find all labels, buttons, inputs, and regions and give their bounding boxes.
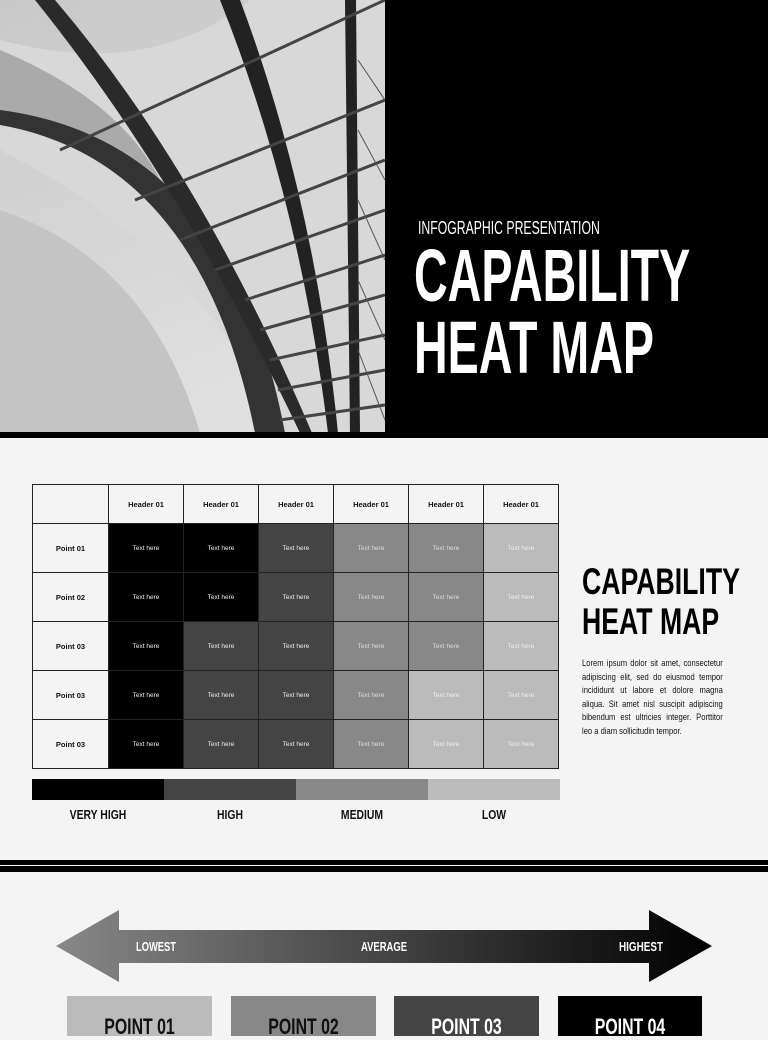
title: HEAT MAP (414, 306, 654, 389)
panel: black title block (385, 0, 768, 433)
heat map table: Header 01 (128, 500, 164, 508)
heat map table: Text here (208, 594, 234, 600)
heat map table: Text here (208, 642, 234, 650)
heat map table: Text here (133, 594, 159, 600)
title (414, 234, 690, 389)
legend labels: HIGH (217, 807, 243, 822)
heat map table: Point 01 (56, 544, 85, 552)
heat map table: Text here (508, 740, 534, 748)
legend bar (32, 779, 560, 800)
double divider (0, 860, 768, 872)
legend labels: LOW (482, 807, 506, 822)
arrow: lowest to highest: AVERAGE (361, 939, 407, 954)
heat map table: Point 03 (56, 740, 85, 748)
heat map table: Text here (508, 642, 534, 650)
side heading (582, 561, 740, 642)
heat map table: Text here (358, 544, 384, 552)
divider line (0, 432, 768, 438)
heat map table: Header 01 (203, 500, 239, 508)
heat map table: Text here (358, 740, 384, 748)
heat map table: Point 03 (56, 690, 85, 700)
heat map table: Text here (358, 642, 384, 650)
heat map table: Header 01 (278, 500, 314, 508)
point 02: POINT 02 (268, 1014, 339, 1039)
legend labels: MEDIUM (341, 807, 383, 822)
side heading: HEAT MAP (582, 601, 719, 642)
legend labels: VERY HIGH (70, 807, 126, 822)
heat map table: Text here (433, 692, 459, 698)
side description: Lorem ipsum dolor sit amet, consectetur adipiscing elit, sed do eiusmod tempor incididunt ut labore et dolore magna aliqua. Sit amet nisl suscipit adipiscing bibendum est ultricies integer. Porttitor leo a diam sollicitudin tempor. (582, 658, 723, 736)
heat map table: Text here (133, 544, 159, 552)
side heading: CAPABILITY (582, 561, 740, 602)
heat map table: Text here (133, 740, 159, 748)
arrow: lowest to highest (56, 910, 712, 982)
arrow: lowest to highest: HIGHEST (619, 939, 663, 954)
point 04: POINT 04 (595, 1014, 665, 1039)
heat map table: Text here (358, 692, 384, 698)
heat map table: Text here (208, 692, 234, 698)
point 01 (67, 996, 212, 1036)
legend labels (70, 807, 506, 822)
point 03: POINT 03 (431, 1014, 502, 1039)
heat map table: Text here (358, 594, 384, 600)
point boxes (67, 996, 702, 1039)
heat map table: Text here (133, 642, 159, 650)
point 04 (558, 996, 702, 1036)
heat map table: Text here (508, 594, 534, 600)
heat map table: Text here (133, 692, 159, 698)
heat map table: Text here (508, 692, 534, 698)
heat map table: Point 03 (56, 642, 85, 650)
point 03 (394, 996, 539, 1036)
heat map table (32, 484, 559, 769)
heat map table: Text here (283, 692, 309, 698)
heat map table: Text here (208, 740, 234, 748)
photo: glass roof (0, 0, 385, 432)
heat map table: Text here (208, 544, 234, 552)
heat map table: Text here (283, 740, 309, 748)
heat map table: Text here (433, 594, 459, 600)
heat map table: Text here (433, 740, 459, 748)
heat map table: Text here (283, 642, 309, 650)
heat map table: Text here (433, 544, 459, 552)
heat map table: Header 01 (353, 500, 389, 508)
subtitle: INFOGRAPHIC PRESENTATION (418, 218, 600, 238)
heat map table: Text here (433, 642, 459, 650)
arrow: lowest to highest: LOWEST (136, 939, 176, 954)
heat map table: Header 01 (428, 500, 464, 508)
point 02 (231, 996, 376, 1036)
point 01: POINT 01 (104, 1014, 175, 1039)
heat map table: Point 02 (56, 592, 85, 602)
title: CAPABILITY (414, 234, 690, 317)
heat map table: Text here (283, 544, 309, 552)
heat map table: Header 01 (503, 500, 539, 508)
heat map table: Text here (508, 544, 534, 552)
heat map table: Text here (283, 594, 309, 600)
